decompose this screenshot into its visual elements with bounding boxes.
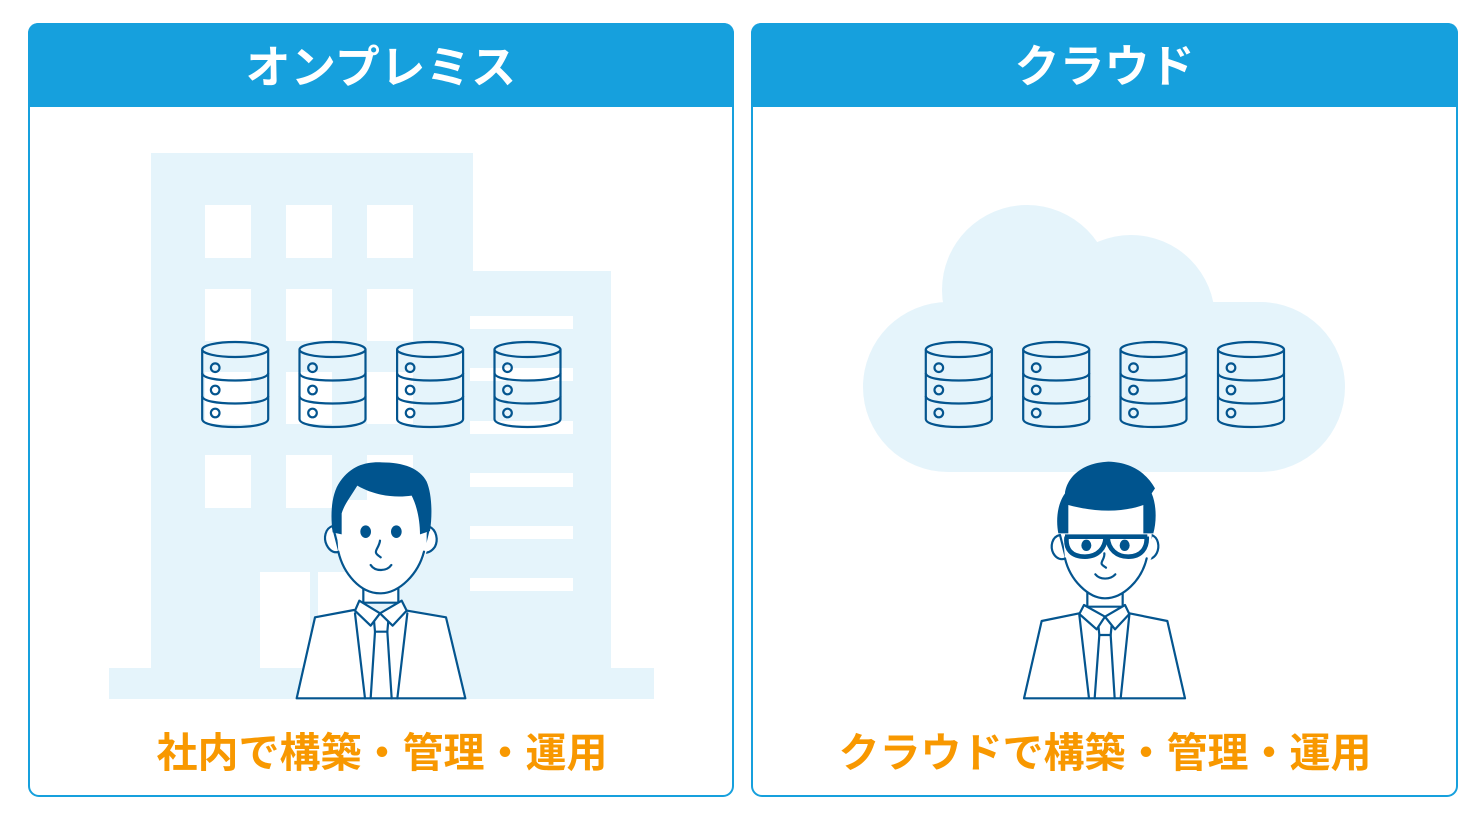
illustration: cloud xyxy=(863,205,1345,472)
caption: cloud: クラウドで構築・管理・運用 xyxy=(838,730,1372,776)
panel: on-premises xyxy=(28,23,734,796)
header band: on-premises xyxy=(28,23,734,107)
heading: on-premises: オンプレミス xyxy=(245,42,517,93)
header band: cloud xyxy=(751,23,1458,107)
icon: four database servers in cloud xyxy=(926,342,1284,427)
panel: cloud xyxy=(751,23,1458,796)
caption: on-premises: 社内で構築・管理・運用 xyxy=(156,730,608,776)
icon: businessman xyxy=(297,462,465,698)
icon: four database servers on-premises xyxy=(202,342,560,427)
heading: cloud: クラウド xyxy=(1014,41,1195,92)
panel frame: cloud xyxy=(752,24,1457,796)
icon: businessman with glasses xyxy=(1024,462,1185,698)
illustration: office building xyxy=(109,153,654,699)
panel frame: on-premises xyxy=(29,24,733,796)
